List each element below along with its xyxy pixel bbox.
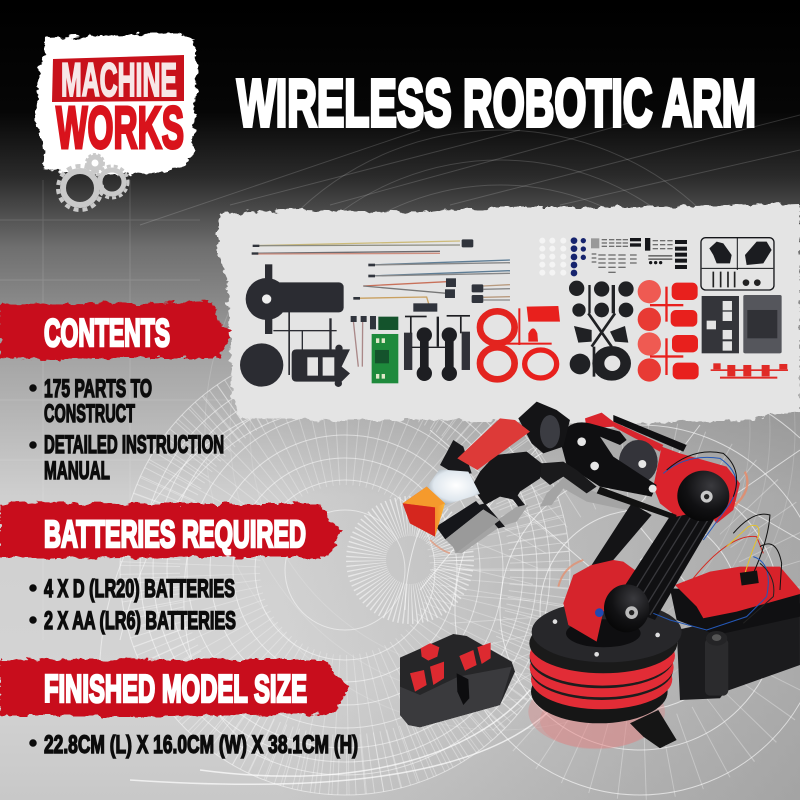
red rings bbox=[480, 311, 515, 379]
black sprue with small parts bbox=[701, 238, 774, 290]
white washers bbox=[539, 238, 566, 276]
red band: finished model size bbox=[0, 659, 348, 716]
text block: batteries list: 2 X AA (LR6) BATTERIES bbox=[44, 607, 236, 635]
gripper wrist bbox=[472, 452, 542, 505]
jumper connector bbox=[740, 571, 759, 585]
base stack bbox=[529, 601, 682, 723]
gripper silver comb bbox=[445, 509, 500, 553]
red elbow housing bbox=[653, 447, 740, 523]
logo gears bbox=[58, 154, 128, 210]
base box bbox=[677, 603, 800, 700]
plate windows bbox=[307, 357, 334, 376]
panel: contents parts background bbox=[218, 203, 800, 425]
text block: contents list: MANUAL bbox=[44, 457, 110, 485]
parts: right group bbox=[500, 237, 788, 382]
wireframe: wheel mesh bbox=[99, 345, 570, 795]
logo white patch bbox=[36, 32, 197, 175]
background grid bbox=[0, 180, 230, 640]
wrist barrel bbox=[518, 402, 570, 453]
gray panels bbox=[702, 295, 782, 353]
base pink shadow bbox=[528, 675, 665, 749]
arm wheel bbox=[619, 440, 658, 483]
gripper black tines bbox=[478, 490, 525, 528]
logo red label bbox=[52, 55, 184, 102]
red small sprue bbox=[711, 363, 788, 379]
parts: left group bbox=[240, 239, 515, 387]
logo text machine: MACHINE bbox=[61, 53, 177, 106]
motors and connectors bbox=[252, 239, 483, 329]
pivot block bbox=[563, 558, 642, 642]
motion shadows bbox=[430, 472, 747, 587]
text block: contents list: 175 PARTS TO bbox=[44, 375, 152, 403]
lower rail bbox=[597, 487, 677, 520]
heading: batteries required: BATTERIES REQUIRED bbox=[44, 514, 306, 556]
logo bbox=[36, 32, 197, 210]
background right shading bbox=[0, 400, 800, 800]
arm pins bbox=[475, 437, 657, 499]
top red strip bbox=[585, 413, 663, 452]
red cube bbox=[403, 487, 445, 537]
gripper ghost shadow bbox=[453, 475, 633, 553]
gripper clear body bbox=[427, 469, 480, 505]
black housing bbox=[240, 264, 350, 387]
pivot joint bbox=[595, 584, 649, 632]
upper arm side plate bbox=[540, 462, 597, 493]
red band: batteries required bbox=[0, 503, 342, 558]
wireframe: right mesh bbox=[405, 375, 800, 795]
controller bbox=[400, 634, 515, 727]
wireframe: upper dark mesh bbox=[140, 115, 800, 730]
text block: contents list bbox=[30, 375, 224, 485]
column on base box bbox=[705, 631, 728, 696]
text block: contents list: DETAILED INSTRUCTION bbox=[44, 431, 224, 459]
text block: model size: 22.8CM (L) X 16.0CM (W) X 38.1CM (H) bbox=[44, 731, 358, 759]
black wheels bbox=[569, 281, 634, 381]
upper arm link plates bbox=[560, 422, 657, 497]
gripper black upper rib bbox=[440, 440, 472, 475]
red gear halves bbox=[638, 280, 699, 382]
text block: batteries list bbox=[30, 575, 236, 635]
top black rail bbox=[613, 415, 687, 452]
red band: contents bbox=[0, 301, 232, 360]
wires bbox=[252, 241, 510, 367]
elbow joint bbox=[677, 471, 729, 521]
text block: contents list: CONSTRUCT bbox=[44, 400, 135, 428]
heading: finished model size: FINISHED MODEL SIZE bbox=[44, 668, 307, 711]
text block: model size bbox=[30, 731, 358, 759]
blue washers bbox=[571, 237, 586, 276]
battery housing bbox=[675, 567, 800, 618]
gripper red cover bbox=[457, 418, 530, 470]
small screws bbox=[591, 238, 673, 273]
green boards bbox=[372, 317, 398, 383]
wires on arm bbox=[653, 452, 782, 630]
link arms bbox=[404, 315, 470, 381]
text block: batteries list: 4 X D (LR20) BATTERIES bbox=[44, 575, 235, 603]
black bars and nuts bbox=[630, 238, 687, 269]
front lower arm beam bbox=[613, 503, 717, 620]
red motor cases bbox=[500, 306, 560, 378]
base foot leg bbox=[630, 710, 677, 748]
heading: contents: CONTENTS bbox=[44, 312, 170, 355]
base box upper black bbox=[670, 588, 800, 635]
gripper comb jaw bbox=[436, 501, 483, 539]
rear lower arm beam bbox=[592, 503, 652, 565]
logo text works: WORKS bbox=[56, 95, 184, 161]
robot arm bbox=[400, 402, 800, 749]
